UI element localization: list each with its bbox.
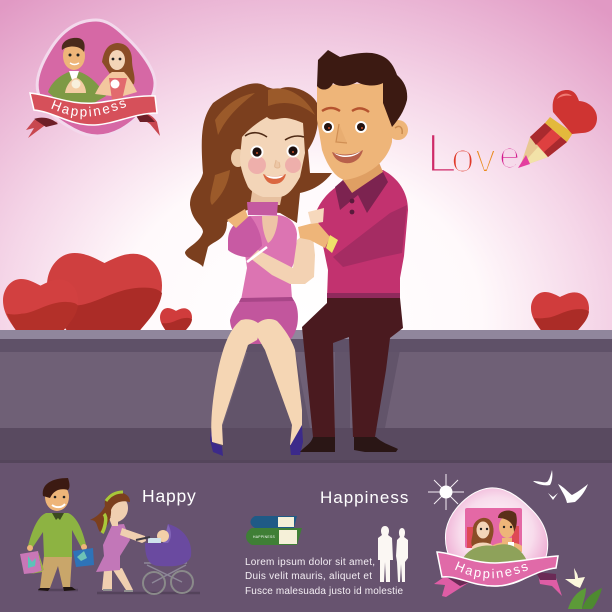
love handwriting: e: [499, 135, 520, 177]
man with shopping bags: [20, 478, 94, 591]
human silhouettes: [378, 526, 408, 582]
book text: HAPPINESS: [253, 535, 276, 539]
pencil with heart eraser: [518, 90, 597, 168]
man's hand and cuff: [298, 208, 338, 253]
blanket: [461, 544, 528, 565]
badge: top-left happiness: [26, 18, 160, 138]
love handwriting: L: [426, 121, 457, 184]
woman eyes: [245, 133, 304, 158]
bed headboard: [465, 508, 522, 548]
woman nose and mouth: [263, 160, 286, 184]
woman pushing pram: [90, 492, 146, 591]
man neck and face: [317, 83, 408, 193]
man trousers: [302, 298, 403, 437]
sun icon: [428, 474, 464, 510]
heading: happiness: Happiness: [320, 488, 409, 507]
heart: large left: [47, 253, 162, 330]
woman hair: [185, 83, 332, 267]
man nose and mouth: [332, 124, 363, 163]
heart: right: [531, 292, 589, 330]
woman neck: [250, 185, 283, 205]
ribbon tails: [434, 572, 562, 597]
birds: [533, 470, 588, 503]
love handwriting: v: [475, 134, 496, 181]
badge man: [48, 38, 106, 103]
woman arm: [250, 228, 315, 284]
badge shape: [445, 488, 548, 586]
pillows: [467, 526, 519, 548]
woman dress and sleeve: [228, 202, 297, 300]
couple illustration: [185, 50, 408, 456]
heading: happy: Happy: [142, 486, 197, 506]
woman legs: [211, 319, 302, 445]
woman ear and face: [231, 117, 305, 197]
heart: small left: [3, 279, 78, 330]
body paragraph: Fusce malesuada justo id molestie: [245, 586, 403, 597]
man collar and buttons: [335, 172, 388, 214]
leg shadows on wall: [222, 345, 401, 428]
badge ribbon: [30, 93, 157, 125]
badge woman: [95, 43, 137, 100]
man shirt: [316, 170, 408, 298]
love handwriting: o: [451, 134, 474, 181]
man in bed: [492, 511, 522, 552]
woman shoes: [210, 425, 303, 456]
badge shape: [37, 20, 155, 136]
badge ribbon tails: [26, 112, 160, 138]
body paragraph: Duis velit mauris, aliquet et: [245, 571, 372, 582]
heart: centre: [160, 308, 192, 330]
grass: [568, 588, 602, 609]
man shoes: [300, 437, 398, 452]
badge ribbon text: Happiness: [51, 100, 126, 120]
book stack icon: [246, 516, 302, 545]
badge: bottom-right happiness: [434, 487, 562, 597]
woman in bed: [471, 518, 494, 552]
ribbon text: Happiness: [455, 561, 528, 581]
woman blush: [248, 156, 301, 174]
ribbon: [437, 552, 558, 586]
bottom panel: [0, 463, 612, 612]
man eyes: [322, 108, 369, 133]
hair highlights: [210, 88, 315, 205]
man hair: [317, 50, 407, 127]
body paragraph: Lorem ipsum dolor sit amet,: [245, 557, 375, 568]
body paragraph: [245, 557, 403, 597]
wall and ledge: [0, 330, 612, 463]
woman skirt: [230, 298, 298, 344]
man sleeve: [333, 205, 407, 267]
ground shadows: [38, 590, 200, 593]
butterfly: [565, 568, 585, 588]
man's hand on shoulder: [227, 209, 248, 228]
family illustration: [20, 478, 200, 594]
pram with baby: [136, 524, 193, 594]
love handwriting: [426, 121, 520, 184]
